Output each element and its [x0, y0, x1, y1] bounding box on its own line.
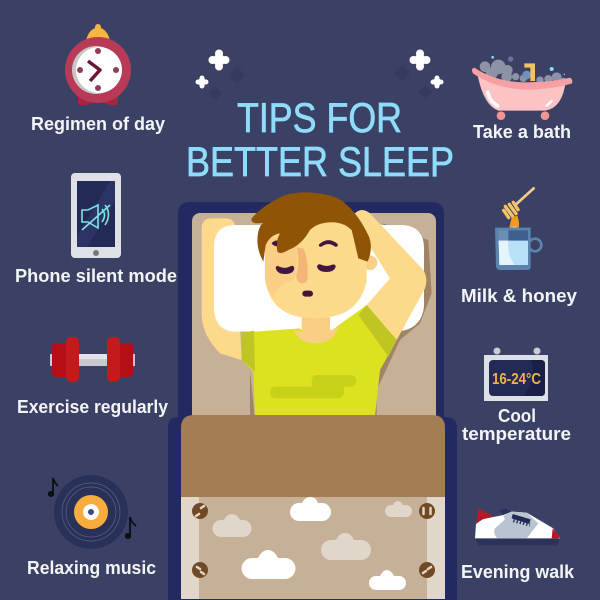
label: Relaxing music: Relaxing music — [27, 558, 156, 578]
label: Regimen of day: Regimen of day — [31, 114, 165, 134]
eyes and mouth — [272, 240, 338, 297]
icon: wall thermometer display — [484, 348, 548, 401]
label: Phone silent mode: Phone silent mode — [15, 266, 177, 286]
upper — [475, 512, 560, 538]
body shadow — [250, 223, 432, 420]
tongue — [498, 508, 513, 516]
toe cap — [552, 528, 560, 538]
mug — [495, 228, 531, 270]
blanket — [181, 415, 445, 497]
label: Cool temperature — [462, 406, 571, 444]
icon: milk mug with honey dipper — [495, 188, 541, 270]
icon: bathtub — [472, 56, 572, 120]
label: Cool temperature: Cool — [498, 406, 536, 426]
sheet — [181, 497, 445, 599]
ear — [363, 255, 377, 270]
sparkle stars — [196, 50, 444, 100]
blanket buttons — [192, 503, 435, 578]
title: BETTER SLEEP — [186, 138, 454, 185]
label: Cool temperature: temperature — [462, 424, 571, 444]
right arm — [355, 210, 426, 340]
icon: phone silent mode — [71, 173, 121, 258]
bed with sleeping boy — [168, 192, 457, 600]
collar — [294, 327, 338, 343]
heel — [477, 508, 493, 523]
music notes — [53, 478, 136, 536]
left arm — [202, 218, 242, 360]
boy — [202, 192, 432, 420]
handle — [529, 239, 541, 251]
label: Take a bath: Take a bath — [473, 122, 571, 142]
label: Milk & honey: Milk & honey — [461, 286, 577, 306]
temperature reading: 16-24°C — [492, 371, 541, 388]
shirt — [242, 305, 397, 416]
sleeves — [242, 305, 397, 372]
panel — [494, 512, 538, 538]
icon: alarm clock — [65, 24, 131, 105]
label: Evening walk: Evening walk — [461, 562, 575, 582]
icon: dumbbell — [50, 337, 135, 382]
neck — [302, 313, 330, 335]
label: Exercise regularly: Exercise regularly — [17, 397, 168, 417]
icon: sneaker — [475, 508, 561, 545]
pillow — [214, 225, 424, 332]
clouds — [212, 497, 412, 590]
nose — [296, 247, 308, 283]
icon: vinyl record with notes — [48, 475, 136, 549]
hair — [251, 192, 371, 262]
head — [251, 192, 371, 318]
shirt fold — [270, 375, 356, 398]
laces — [512, 514, 531, 524]
face shade — [265, 237, 298, 297]
mattress — [192, 213, 436, 423]
dipper — [516, 188, 534, 204]
bed frame — [168, 202, 457, 600]
title: TIPS FOR — [237, 94, 402, 141]
face — [265, 222, 367, 318]
title — [186, 94, 454, 185]
sole — [475, 537, 561, 545]
